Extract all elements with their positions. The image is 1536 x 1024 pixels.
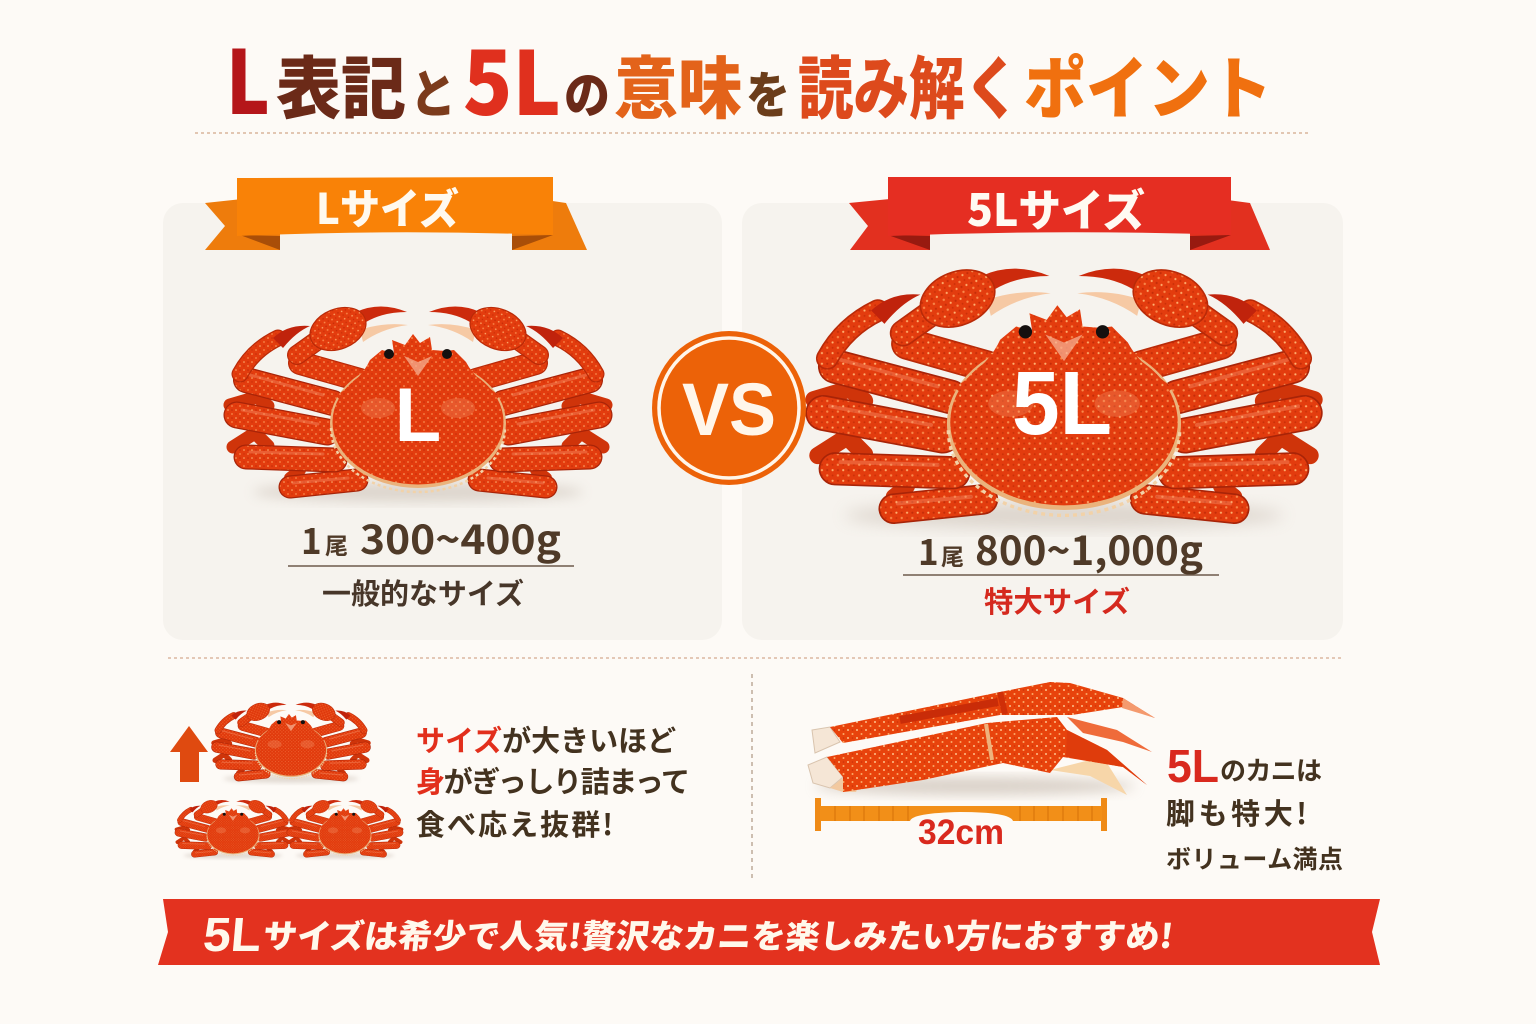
ribbon: 5L size [849, 175, 1270, 250]
illustration: 5L crab [814, 259, 1314, 529]
title: 読み解く [798, 34, 1020, 133]
text: meat description: サイズが大きいほど [416, 718, 676, 760]
title: ポイント [1024, 34, 1272, 133]
weight: 5L size: 1 [918, 525, 939, 576]
VS badge [652, 331, 806, 485]
weight: 5L size: 尾 [941, 538, 964, 572]
illustration: L crab: L [395, 373, 441, 458]
ruler with 32cm: 32cm [918, 813, 1004, 852]
title: 5L [463, 14, 561, 141]
weight: L size [288, 508, 574, 613]
title: を [746, 56, 790, 128]
title [226, 13, 1272, 141]
ruler with 32cm [815, 798, 1107, 852]
weight: 5L size [903, 519, 1219, 621]
text: leg description: 5L [1167, 740, 1219, 792]
text: leg description [1166, 740, 1343, 876]
illustration: three crabs [177, 700, 401, 859]
weight: 5L size: 800~1,000g [975, 519, 1203, 577]
text: meat description: 身がぎっしり詰まって [416, 759, 690, 801]
banner: 5L [201, 908, 264, 962]
title: 意味 [614, 34, 742, 133]
panel: L size [163, 176, 722, 640]
illustration: crab legs [808, 682, 1155, 795]
text: meat description: 食べ応え抜群! [416, 802, 613, 844]
text: leg description: 脚も特大! [1166, 791, 1307, 833]
title: L [226, 13, 270, 140]
VS badge: VS [682, 368, 776, 451]
text: leg description: のカニは [1220, 751, 1322, 788]
ribbon: L size: Lサイズ [316, 176, 459, 237]
banner: サイズは希少で人気!贅沢なカニを楽しみたい方におすすめ! [261, 910, 1176, 958]
icon: up arrow [170, 726, 208, 782]
ribbon: 5L size: 5Lサイズ [967, 175, 1145, 239]
weight: L size: 尾 [325, 527, 348, 561]
title: と [410, 53, 456, 128]
section: leg size [808, 682, 1343, 876]
title: 表記 [276, 34, 406, 133]
text: leg description: ボリューム満点 [1166, 840, 1343, 876]
banner [158, 899, 1380, 965]
weight: L size: 300~400g [360, 508, 561, 566]
illustration: 5L crab: 5L [1012, 354, 1112, 454]
panel: 5L size [742, 175, 1343, 640]
illustration: L crab [230, 300, 606, 502]
section: more meat [170, 700, 690, 859]
title: の [564, 56, 610, 128]
weight: L size: 一般的なサイズ [322, 571, 524, 613]
weight: 5L size: 特大サイズ [984, 579, 1130, 621]
weight: L size: 1 [301, 514, 322, 565]
text: meat description [416, 718, 690, 844]
ribbon: L size [205, 176, 587, 250]
